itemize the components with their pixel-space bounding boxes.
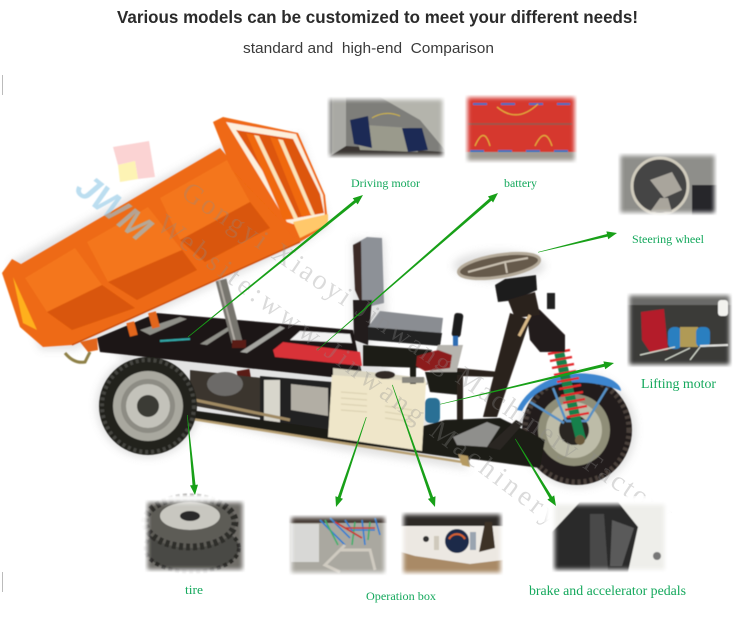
tricycle illustration: [2, 117, 636, 488]
thumbnail: gauge panel: [399, 510, 505, 577]
thumbnail: steering wheel: [616, 151, 719, 217]
soft halo behind vehicle: [10, 135, 636, 488]
watermark text: Gongyi Xiaoyi Jinwang Machinery Factory: [176, 176, 678, 529]
fender: [517, 373, 621, 423]
title: Various models can be customized to meet your different needs!: [117, 7, 638, 27]
rear wheel: [99, 357, 197, 455]
thumbnail: battery: [463, 93, 579, 165]
label: steering wheel: Steering wheel: [632, 232, 705, 246]
blue motor: [425, 398, 440, 423]
thumbnail: lifting motor: [625, 291, 734, 369]
crop mark top: [2, 75, 3, 95]
label: driving motor: Driving motor: [351, 176, 420, 190]
fuel tank and lever: [416, 313, 464, 420]
crop mark bottom: [2, 572, 3, 592]
arrow: wiring: [335, 417, 367, 507]
label: battery: battery: [504, 176, 537, 190]
arrow: operation box: [392, 385, 436, 507]
suspension fork: [548, 350, 589, 445]
arrow: steering wheel: [538, 231, 617, 252]
steering column and frame tube: [457, 275, 565, 417]
arrow: driving motor: [188, 195, 363, 337]
thumbnail: driving motor: [325, 95, 447, 160]
thumbnail: wiring: [287, 513, 389, 577]
dump bed: [2, 117, 328, 347]
steering wheel: [457, 249, 541, 283]
arrow: battery: [317, 193, 498, 350]
control box: [328, 353, 426, 451]
arrow: pedals: [515, 439, 556, 506]
label: lifting motor: Lifting motor: [641, 377, 716, 392]
frame: [65, 311, 362, 377]
label: tire: tire: [185, 582, 203, 597]
frame battery: [273, 342, 362, 366]
arrow: tire: [187, 415, 198, 495]
subtitle: standard and high-end Comparison: [243, 40, 494, 57]
under frame machinery: [190, 370, 470, 463]
thumbnail: pedals: [550, 500, 669, 574]
tailgate flange: [213, 117, 328, 238]
floor and pedals: [420, 418, 545, 468]
watermark text: Website:www.Jinwang Machinery: [151, 209, 565, 531]
logo watermark: JWM: [68, 165, 160, 250]
lift cylinder: [219, 280, 250, 410]
seat: [353, 237, 443, 368]
label: pedals: brake and accelerator pedals: [529, 584, 686, 599]
label: operation box: Operation box: [366, 589, 436, 603]
arrow: lifting motor: [440, 361, 614, 404]
front wheel: [522, 375, 632, 485]
thumbnail: tire: [143, 496, 247, 574]
